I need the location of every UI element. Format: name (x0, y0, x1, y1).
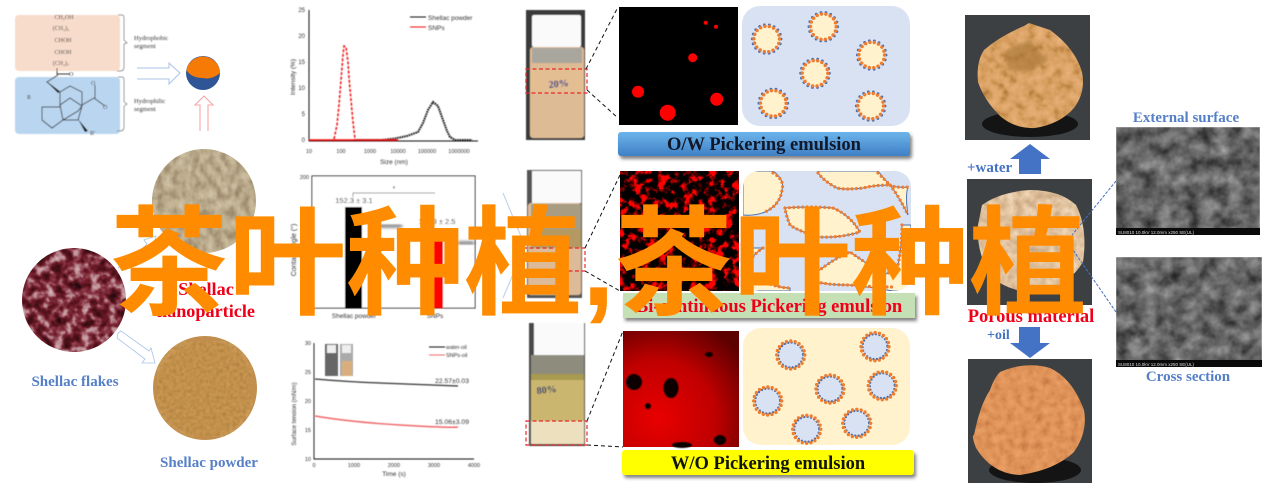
callout: dashed lead lines O/W (586, 7, 618, 118)
x labels: 0 (312, 463, 316, 469)
label: shellac powder: Shellac powder (160, 455, 258, 471)
category labels: SNPs (427, 313, 444, 320)
x axis labels: 10000 (390, 149, 406, 155)
arrow: down blue (1010, 327, 1050, 358)
label: +oil: +oil (987, 328, 1010, 343)
y labels: 20 (305, 399, 311, 405)
y ticks: 200 (300, 175, 309, 181)
callout: red dashed box O/W (526, 69, 587, 93)
image: SEM external surface: SU8010 10.0kV 12.0mm x250 SE(UL) (1118, 230, 1195, 235)
label: hydrophilic segment: segment (134, 106, 156, 113)
arrow: flakes to nanoparticle (118, 236, 156, 270)
y labels: 15 (305, 428, 311, 434)
significance star: * (393, 186, 396, 193)
chemical chain labels: (CH₂)₇ (53, 60, 69, 67)
x axis labels: 1000 (364, 149, 376, 155)
x labels: 1000 (348, 463, 360, 469)
image: bicontinuous confocal (620, 171, 739, 291)
atom labels: O (103, 105, 108, 111)
x axis labels: 1000000 (448, 149, 470, 155)
bar: shellac powder (345, 207, 362, 308)
callout: red dashed box W/O (526, 421, 587, 445)
line: SNPs-oil (315, 416, 458, 427)
photo: W/O vial: 80% (536, 384, 557, 397)
callout: dashed lead lines W/O (587, 331, 623, 447)
wedge bonds (46, 81, 88, 132)
photo: shellac flakes (20, 246, 128, 354)
image: SEM external surface (1116, 127, 1260, 235)
diagram: bicontinuous structure (743, 171, 911, 291)
hydrophilic segment block (15, 77, 120, 134)
arrow: up blue (1010, 144, 1050, 174)
y axis ticks and labels: 20 (298, 34, 306, 40)
x labels: 3000 (428, 463, 440, 469)
chart: size distribution (290, 8, 478, 166)
value: SNPs: 112.3 ± 2.5 (419, 217, 455, 226)
category labels: Shellac powder (332, 313, 377, 320)
atom labels (27, 72, 108, 137)
axis title: time: Time (s) (382, 471, 406, 478)
arrow: dashed to cross section (1073, 250, 1116, 312)
icon: janus particle (186, 56, 220, 90)
axis title: size: Size (nm) (380, 159, 408, 166)
bracket: hydrophilic (117, 77, 127, 131)
arrow: flakes to powder (117, 331, 155, 363)
axis title: intensity: Intensity (%) (290, 59, 297, 95)
photo: porous material (967, 179, 1092, 305)
line: water-oil (315, 379, 458, 386)
arrow: dashed to external surface (1072, 181, 1116, 235)
banner: W/O Pickering emulsion: W/O Pickering emulsion (671, 454, 866, 474)
diagram: O/W droplets (742, 6, 910, 126)
y labels: 30 (305, 341, 311, 347)
y labels: 25 (305, 370, 311, 376)
legend: SNPs (428, 25, 445, 32)
x axis labels: 100 (336, 149, 346, 155)
banner: O/W Pickering emulsion (618, 132, 910, 156)
photo: O/W vial (526, 10, 585, 140)
y axis ticks and labels: 0 (302, 138, 306, 144)
chemical chain labels: CHOH (54, 38, 72, 44)
x labels: 4000 (468, 463, 480, 469)
banner: bi-continuous Pickering emulsion: Bi-continuous Pickering emulsion (636, 297, 903, 317)
y axis ticks and labels (298, 8, 306, 144)
photo: shellac nanoparticle (150, 148, 258, 254)
atom labels: R (27, 95, 31, 101)
category labels (332, 313, 444, 320)
chart: contact angle (290, 175, 475, 320)
legend: Shellac powder (428, 15, 473, 22)
label: hydrophilic segment: Hydrophilic (134, 98, 166, 105)
label: porous material: Porous material (968, 307, 1094, 327)
banner: W/O Pickering emulsion (622, 450, 914, 475)
x axis labels: 10 (306, 149, 312, 155)
line: SNPs (334, 46, 355, 139)
y labels (305, 341, 311, 463)
line: shellac powder (354, 102, 472, 140)
x labels: 2000 (388, 463, 400, 469)
label: shellac nanoparticle: Shellac (178, 279, 234, 299)
atom labels: O (91, 81, 96, 87)
x labels (312, 463, 480, 469)
arrow: red outline up (195, 96, 213, 131)
legend (410, 15, 473, 32)
x axis labels (306, 149, 470, 155)
label: shellac flakes: Shellac flakes (31, 374, 119, 390)
image: SEM cross section: SU8010 10.0kV 12.0mm x250 SE(UL) (1118, 362, 1195, 367)
legend: water-oil (445, 345, 467, 351)
image: W/O confocal (623, 331, 739, 448)
callout: dashed lead lines bicontinuous (585, 175, 620, 291)
photo: O/W vial: 20% (548, 78, 569, 91)
y axis ticks and labels: 25 (298, 8, 306, 14)
label: cross section: Cross section (1146, 369, 1231, 385)
callout: red dashed box bicontinuous (523, 248, 585, 271)
diagram: W/O droplets (743, 328, 910, 445)
chemical chain labels: CH₂OH (54, 15, 74, 21)
title overlay: 茶叶种植,茶叶种植 (110, 199, 1087, 331)
label: hydrophobic segment: Hydrophobic (134, 35, 168, 42)
value labels: 15.06±3.09 (435, 419, 469, 426)
panel: molecular structure (15, 15, 168, 137)
y axis ticks and labels: 5 (302, 112, 306, 118)
image: O/W confocal (619, 7, 738, 125)
legend: SNPs-oil (446, 353, 467, 359)
atom labels: O (69, 72, 74, 78)
atom labels: R' (90, 131, 95, 137)
bracket: hydrophobic (117, 15, 127, 71)
chemical chain labels (53, 15, 74, 67)
ring skeleton (42, 68, 105, 128)
hydrophobic segment block (15, 15, 120, 71)
photo: bicontinuous vial (527, 170, 582, 298)
value: shellac: 152.3 ± 3.1 (335, 196, 373, 205)
y axis ticks and labels: 10 (298, 86, 306, 92)
chart: surface tension (292, 341, 480, 478)
x axis labels: 100000 (418, 149, 436, 155)
banner: O/W Pickering emulsion: O/W Pickering emulsion (667, 135, 862, 155)
inset vials (325, 344, 353, 376)
label: external surface: External surface (1133, 110, 1239, 126)
label: hydrophobic segment: segment (134, 43, 156, 50)
y labels: 10 (305, 457, 311, 463)
chemical chain labels: (CH₂)₅ (53, 25, 69, 32)
droplet insets (378, 226, 474, 243)
bar: SNPs (430, 239, 443, 308)
image: SEM cross section (1116, 257, 1262, 367)
y axis ticks and labels: 15 (298, 60, 306, 66)
significance bracket (353, 193, 435, 197)
label: shellac nanoparticle: nanoparticle (157, 301, 255, 321)
arrow: pale chevron between charts and vials (503, 193, 525, 298)
photo: W/O vial (529, 323, 585, 446)
photo: oil-absorbed ball (968, 359, 1092, 483)
axis title: surface tension: Surface tension (mN/m) (292, 382, 298, 446)
SNPs baseline (309, 139, 398, 141)
label: +water: +water (967, 160, 1013, 176)
legend (429, 345, 467, 359)
photo: water-absorbed ball (965, 15, 1090, 140)
chemical chain labels: CHOH (54, 50, 72, 56)
arrow: outline to janus particle (137, 63, 180, 84)
value labels: 22.57±0.03 (435, 378, 469, 385)
value labels (435, 378, 469, 426)
axis title: Contact angle (°) (290, 224, 298, 276)
photo: shellac powder (151, 334, 259, 442)
